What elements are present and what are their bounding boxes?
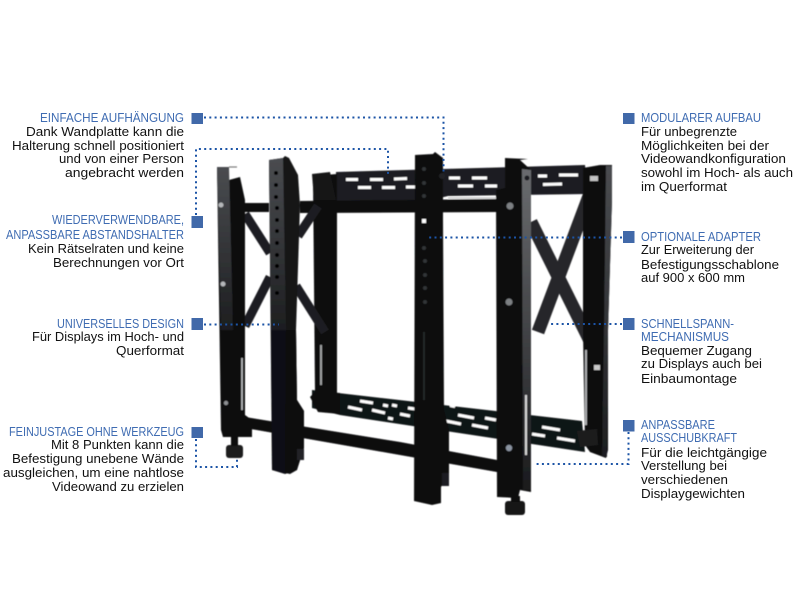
leader line	[196, 439, 237, 467]
heading: UNIVERSELLES DESIGN	[57, 317, 184, 331]
callout: Wiederverwendbare Abstandshalter	[6, 149, 388, 270]
heading: EINFACHE AUFHÄNGUNG	[40, 111, 184, 125]
cross braces left	[245, 206, 325, 332]
description	[641, 446, 767, 501]
description: Befestigung unebene Wände	[12, 452, 184, 466]
description: ausgleichen, um eine nahtlose	[3, 466, 184, 480]
leader line	[204, 324, 279, 326]
heading: ANPASSBARE ABSTANDSHALTER	[6, 228, 184, 242]
description	[28, 242, 185, 270]
heading	[641, 317, 734, 344]
description: Einbaumontage	[641, 372, 737, 386]
description	[3, 438, 184, 494]
right column	[577, 165, 612, 458]
description: Videowandkonfiguration	[641, 152, 786, 166]
description	[641, 344, 762, 386]
description	[641, 125, 793, 194]
product photo: video wall mount	[217, 152, 612, 515]
heading: AUSSCHUBKRAFT	[641, 431, 737, 445]
description: und von einer Person	[59, 152, 184, 166]
description	[12, 125, 185, 180]
description: Displaygewichten	[641, 487, 745, 501]
description: Bequemer Zugang	[641, 344, 752, 358]
description: verschiedenen	[641, 473, 728, 487]
heading: SCHNELLSPANN-	[641, 317, 734, 331]
description: Für die leichtgängige	[641, 446, 767, 460]
description: Für unbegrenzte	[641, 125, 737, 139]
description: Videowand zu erzielen	[52, 480, 184, 494]
column 4	[496, 158, 531, 515]
callout: Einfache Aufhängung	[12, 111, 444, 180]
column 3	[414, 152, 449, 505]
description: Mit 8 Punkten kann die	[51, 438, 184, 452]
callout: Modularer Aufbau	[623, 111, 793, 194]
heading: ANPASSBARE	[641, 418, 715, 432]
description: Möglichkeiten bei der	[641, 139, 769, 153]
heading: OPTIONALE ADAPTER	[641, 230, 761, 244]
callout: Feinjustage ohne Werkzeug	[3, 425, 237, 494]
description: Befestigungsschablone	[641, 258, 779, 272]
description: Querformat	[116, 344, 185, 358]
marker square	[192, 427, 203, 438]
heading: FEINJUSTAGE OHNE WERKZEUG	[9, 425, 184, 439]
column 2	[269, 156, 304, 474]
callout: Schnellspann-Mechanismus	[550, 317, 762, 386]
callout: Anpassbare Ausschubkraft	[535, 418, 767, 501]
description: Berechnungen vor Ort	[53, 256, 185, 270]
leader line	[426, 236, 622, 238]
leader line	[204, 118, 444, 172]
cross braces right	[531, 188, 592, 345]
marker square	[623, 113, 634, 124]
heading: MODULARER AUFBAU	[641, 111, 761, 125]
column 1	[217, 167, 252, 458]
marker square	[623, 318, 634, 330]
rear left bracket	[310, 172, 340, 414]
heading: WIEDERVERWENDBARE,	[52, 213, 184, 227]
description: zu Displays auch bei	[641, 357, 762, 371]
marker square	[192, 318, 203, 330]
heading	[641, 418, 737, 445]
marker square	[623, 420, 634, 432]
leader line	[550, 323, 622, 325]
description: auf 900 x 600 mm	[641, 271, 745, 285]
leader line	[535, 432, 628, 464]
description: Für Displays im Hoch- und	[32, 330, 184, 344]
description: sowohl im Hoch- als auch	[641, 166, 793, 180]
callout: Optionale Adapter	[426, 230, 779, 285]
bottom wall plate	[245, 390, 585, 472]
marker square	[192, 113, 203, 124]
top wall plate	[242, 165, 588, 213]
leader line	[196, 149, 388, 215]
marker square	[192, 216, 203, 228]
description	[32, 330, 185, 358]
description: Halterung schnell positioniert	[12, 139, 185, 153]
marker square	[623, 231, 634, 243]
heading	[6, 213, 184, 242]
description: Verstellung bei	[641, 459, 727, 473]
description: Dank Wandplatte kann die	[26, 125, 184, 139]
description: im Querformat	[641, 180, 728, 194]
description: Zur Erweiterung der	[641, 243, 754, 257]
description: Kein Rätselraten und keine	[28, 242, 184, 256]
description	[641, 243, 779, 285]
heading: MECHANISMUS	[641, 330, 729, 344]
callout: Universelles Design	[32, 317, 279, 358]
description: angebracht werden	[65, 166, 184, 180]
